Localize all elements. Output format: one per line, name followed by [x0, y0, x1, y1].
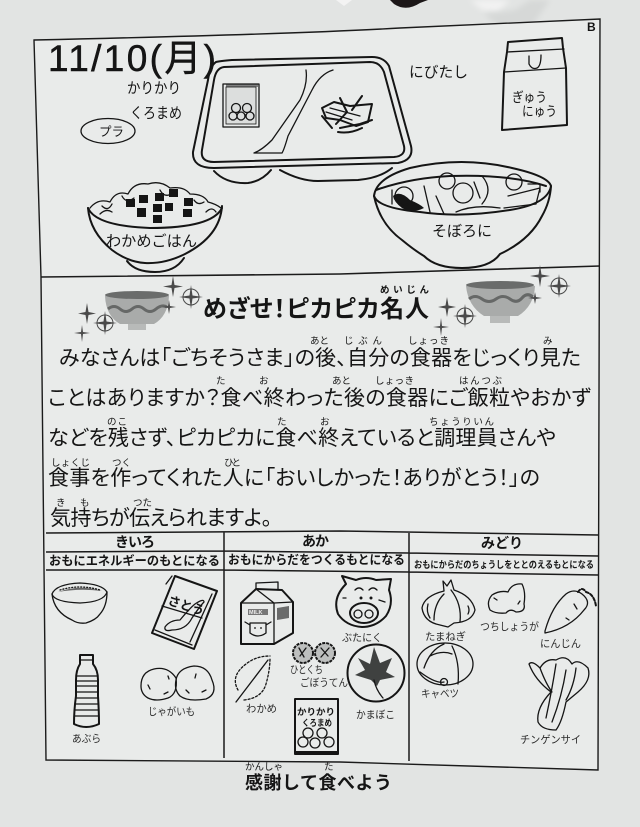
panel: article — [48, 265, 591, 530]
article body text: あと — [310, 336, 329, 347]
heading: yellow: きいろ — [115, 534, 155, 550]
description: yellow: おもにエネルギーのもとになる — [49, 554, 220, 568]
icon: wakame seaweed: わかめ — [246, 703, 277, 715]
article body text: 気持ちが伝えられますよ。 — [50, 507, 272, 530]
icon: milk pack — [241, 582, 293, 644]
article body text: ちょうりいん — [429, 417, 494, 428]
article body text: みなさんは「ごちそうさま」の後、自分の食器をじっくり見た — [59, 347, 581, 370]
article body text: た — [216, 376, 226, 387]
article body text: も — [80, 498, 90, 509]
column: yellow group — [49, 534, 220, 745]
icon: carrot — [540, 589, 596, 650]
panel: menu illustration — [48, 20, 596, 272]
icon: karikari kuromame package: かりかり — [297, 707, 335, 717]
label: plastic mark: プラ — [99, 125, 124, 139]
icon: pig — [336, 576, 391, 644]
icon: milk carton: ぎゅう — [512, 90, 547, 105]
article body text: などを残さず、ピカピカに食べ終えていると調理員さんや — [48, 427, 556, 450]
label: kurimame — [127, 80, 182, 122]
icon: wakame seaweed — [235, 656, 277, 715]
icon: sugar bag — [152, 576, 217, 649]
icon: sparkles left — [74, 276, 203, 342]
icon: oil bottle: あぶら — [72, 733, 101, 745]
article body text: き — [56, 498, 66, 509]
icon: gobo-ten balls: ごぼうてん — [300, 676, 348, 689]
icon: rice bowl — [52, 583, 107, 623]
icon: carrot: にんじん — [540, 638, 581, 650]
article body text: じぶん — [344, 336, 382, 347]
article body text: つく — [112, 458, 131, 469]
label: nibitashi: にびたし — [409, 64, 468, 81]
article body text: はんつぶ — [459, 376, 502, 387]
icon: cabbage — [417, 643, 473, 700]
date heading: 11/10(月) — [48, 38, 216, 79]
icon: pig: ぶたにく — [342, 632, 382, 644]
article body text: あと — [332, 376, 351, 387]
icon: oil bottle — [72, 655, 101, 745]
icon: wakame rice bowl — [88, 183, 222, 272]
article body text: しょっき — [375, 376, 414, 387]
column: green group — [414, 535, 596, 746]
footer slogan: 感謝して食べよう — [245, 772, 392, 793]
article body text: しょっき — [408, 336, 449, 347]
article heading: めいじん — [380, 285, 429, 296]
article body text: 食事を作ってくれた人に「おいしかった！ありがとう！」の — [48, 467, 540, 490]
icon: ginger: つちしょうが — [480, 620, 539, 633]
icon: milk carton: にゅう — [522, 104, 557, 119]
icon: divided tray — [193, 57, 411, 183]
icon: sugar bag: さとう — [166, 594, 206, 618]
divider: menu and article — [41, 266, 600, 277]
label: plastic mark — [81, 118, 135, 144]
icon: karikari kuromame package — [295, 699, 338, 754]
icon: gobo-ten balls — [290, 643, 348, 689]
icon: bok choy — [520, 658, 589, 746]
article body text: お — [259, 376, 269, 387]
article body text: ことはありますか？食べ終わった後の食器にご飯粒やおかず — [48, 387, 591, 410]
icon: potatoes: じゃがいも — [148, 705, 195, 718]
heading: red: あか — [302, 533, 329, 549]
icon: milk carton — [502, 38, 567, 130]
description: green: おもにからだのちょうしをととのえるもとになる — [414, 560, 594, 571]
article body text: た — [277, 417, 287, 428]
icon: karikari kuromame package: くろまめ — [302, 718, 332, 728]
icon: sparkles right — [433, 265, 571, 336]
sheet mark B: B — [587, 20, 596, 34]
icon: simmered greens — [322, 96, 372, 132]
icon: kamaboko leaf — [348, 644, 404, 721]
icon: gobo-ten balls: ひとくち — [290, 664, 323, 676]
icon: milk pack: MILK — [249, 610, 262, 616]
description: red: おもにからだをつくるもとになる — [228, 553, 405, 567]
article body text: しょくじ — [51, 458, 90, 469]
column: red group — [228, 533, 405, 754]
label: kurimame: くろまめ — [130, 105, 182, 122]
article body text: お — [320, 417, 330, 428]
icon: onion — [422, 580, 475, 643]
icon: shiny bowl right — [466, 281, 535, 323]
article body text: み — [543, 336, 553, 347]
label: kurimame: かりかり — [127, 80, 181, 97]
icon: onion: たまねぎ — [425, 630, 466, 643]
footer slogan: かんしゃ — [245, 762, 283, 773]
panel: food groups table — [46, 531, 598, 761]
footer slogan: た — [324, 762, 334, 773]
icon: cabbage: キャベツ — [421, 688, 459, 700]
icon: soboro soup bowl: そぼろに — [432, 223, 492, 240]
icon: shiny bowl left — [105, 291, 169, 330]
heading: green: みどり — [481, 535, 523, 551]
article heading: めざせ！ピカピカ名人 — [203, 295, 429, 323]
article body text: ひと — [224, 458, 241, 469]
icon: potatoes — [141, 666, 214, 718]
footer slogan — [245, 762, 392, 793]
article body text — [48, 336, 591, 530]
icon: bok choy: チンゲンサイ — [520, 734, 581, 746]
icon: snack package in tray — [223, 84, 259, 127]
icon: ginger — [480, 584, 539, 633]
article body text: つた — [133, 498, 152, 509]
icon: kamaboko leaf: かまぼこ — [356, 709, 395, 721]
article body text: のこ — [107, 417, 127, 428]
icon: wakame rice bowl: わかめごはん — [106, 233, 197, 250]
icon: soboro soup bowl — [374, 162, 551, 268]
